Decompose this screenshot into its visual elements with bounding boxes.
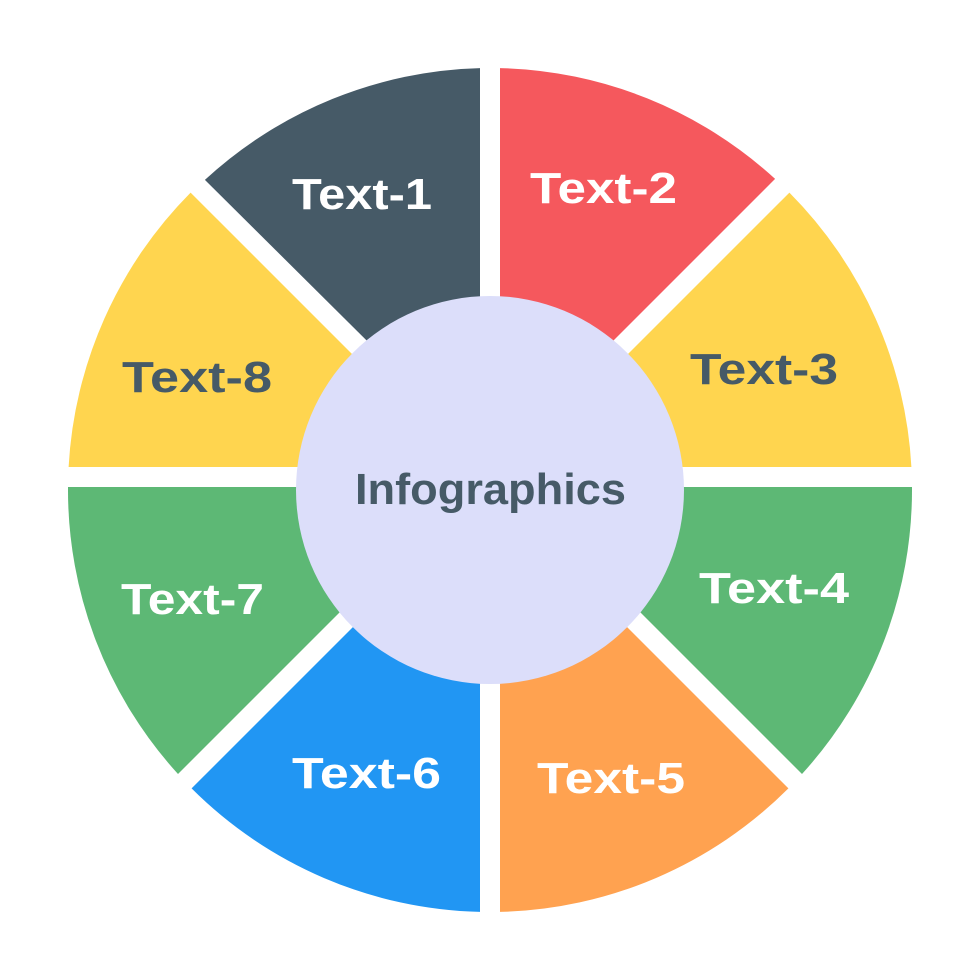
segment 7: green: [68, 487, 465, 774]
label: Text-7: Text-7: [121, 575, 264, 624]
segment 8: yellow: [69, 193, 465, 467]
segment 1: dark slate: [205, 68, 480, 453]
label: Text-3: Text-3: [690, 345, 838, 394]
label: Text-8: Text-8: [122, 353, 272, 402]
segment 6: blue: [192, 500, 480, 912]
segment 2: red: [500, 68, 775, 454]
segment 3: yellow: [515, 193, 911, 467]
label: Text-1: Text-1: [292, 170, 432, 219]
label: Text-5: Text-5: [537, 754, 685, 803]
heading: Infographics: Infographics: [355, 465, 626, 514]
label: Text-2: Text-2: [530, 164, 677, 213]
label: Text-4: Text-4: [699, 564, 850, 613]
label: Text-6: Text-6: [292, 749, 441, 798]
center hub: [296, 296, 684, 684]
segment 5: orange: [500, 500, 788, 912]
segment 4: green: [515, 487, 912, 774]
